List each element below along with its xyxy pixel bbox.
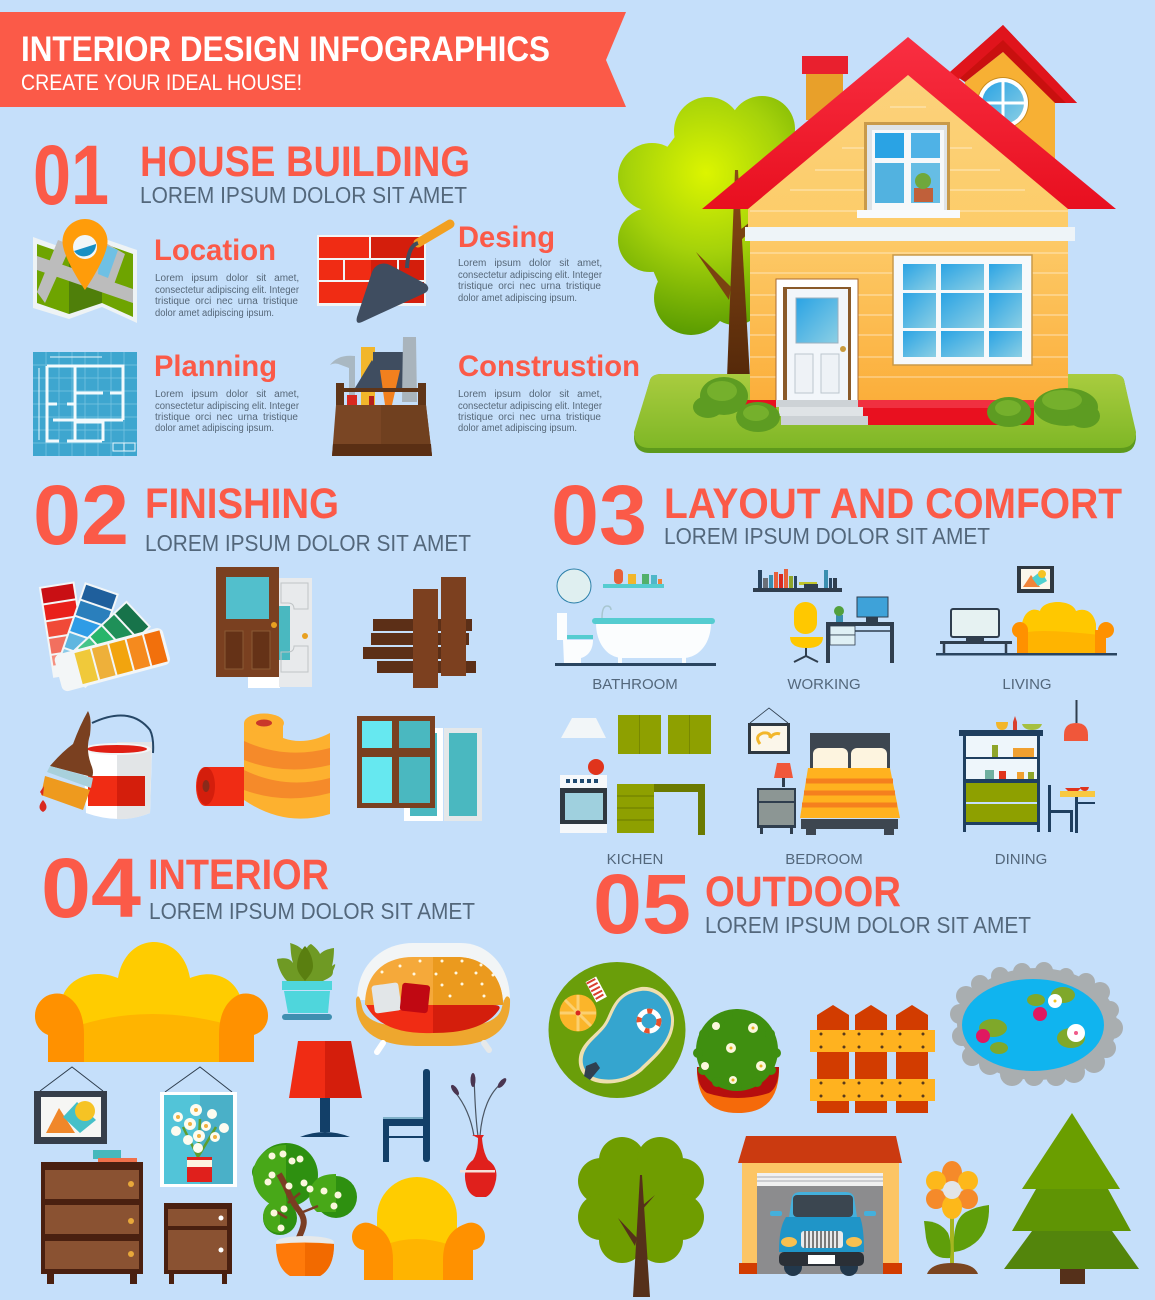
text block: location: Lorem ipsum dolor sit amet, xyxy=(155,273,299,284)
icon: brick wall and trowel xyxy=(317,224,450,323)
icon: yellow sofa xyxy=(35,942,268,1062)
text block: construstion: consectetur adipiscing elit. Integer xyxy=(458,401,603,412)
icon: flower xyxy=(924,1161,989,1274)
heading: 01 house building: 01 xyxy=(33,128,109,222)
icon: wallpaper roll xyxy=(196,714,330,819)
title banner: INTERIOR DESIGN INFOGRAPHICS xyxy=(21,30,550,69)
icon: living xyxy=(936,566,1117,656)
heading: 01 house building xyxy=(33,128,470,222)
bushes xyxy=(693,377,1100,432)
heading: 01 house building: LOREM IPSUM DOLOR SIT AMET xyxy=(140,182,467,208)
heading: 03 layout and comfort xyxy=(551,468,1122,562)
icon: potted plant xyxy=(277,943,335,1020)
label: bedroom: BEDROOM xyxy=(785,851,863,868)
heading: 04 interior: INTERIOR xyxy=(148,851,329,899)
steps and red path xyxy=(740,400,1034,425)
icon: bathroom xyxy=(555,569,716,666)
icon: tree xyxy=(578,1137,704,1297)
chimney xyxy=(802,56,848,120)
icon: chair xyxy=(383,1069,430,1162)
heading: 02 finishing xyxy=(33,468,471,562)
heading: 05 outdoor xyxy=(593,857,1031,951)
heading: 04 interior: LOREM IPSUM DOLOR SIT AMET xyxy=(149,898,475,924)
icon: blueprint xyxy=(33,352,137,456)
icon: window samples xyxy=(357,716,482,821)
icon: toolbox xyxy=(330,337,432,456)
label: kichen: KICHEN xyxy=(607,851,663,868)
icon: pond xyxy=(950,962,1123,1086)
text block: construstion: Construstion xyxy=(458,350,640,383)
heading: 03 layout and comfort: LAYOUT AND COMFORT xyxy=(664,480,1122,528)
text block: planning: tristique orci nec urna tristique xyxy=(155,412,298,423)
title banner: CREATE YOUR IDEAL HOUSE! xyxy=(21,70,302,95)
icon: round sofa xyxy=(356,943,510,1052)
text block: desing xyxy=(458,221,603,304)
icon: picture frame mountains xyxy=(34,1067,107,1144)
text block: construstion: Lorem ipsum dolor sit amet, xyxy=(458,389,602,400)
big window xyxy=(893,255,1032,365)
lawn xyxy=(634,374,1136,453)
label: working: WORKING xyxy=(787,676,861,693)
text block: planning: Lorem ipsum dolor sit amet, xyxy=(155,389,299,400)
text block: planning: Planning xyxy=(154,350,277,383)
icon: kitchen xyxy=(560,715,711,835)
label: dining: DINING xyxy=(995,851,1047,868)
icon: working xyxy=(753,569,894,663)
icon: wood planks xyxy=(363,577,476,688)
tree behind house xyxy=(618,96,815,378)
heading: 05 outdoor: OUTDOOR xyxy=(705,868,901,916)
icon: paint bucket and brush xyxy=(40,711,153,819)
icon: fir tree xyxy=(1004,1113,1139,1284)
icon: bedroom xyxy=(748,708,900,835)
icon: bonsai xyxy=(252,1143,357,1276)
icon: flower bush xyxy=(693,1009,781,1113)
icon: vase with reeds xyxy=(450,1073,508,1197)
title banner xyxy=(0,12,626,107)
heading: 02 finishing: LOREM IPSUM DOLOR SIT AMET xyxy=(145,530,471,556)
label: living: LIVING xyxy=(1002,676,1052,693)
illustration: house xyxy=(618,25,1136,453)
text block: desing: dolor amet adipiscing ipsum. xyxy=(458,293,577,304)
icon: dining xyxy=(959,700,1095,833)
icon: nightstand xyxy=(164,1203,232,1284)
text block: location: Location xyxy=(154,234,276,267)
icon: armchair xyxy=(352,1177,485,1280)
icon: fence xyxy=(810,1005,935,1113)
icon: colour swatch fan xyxy=(39,581,171,692)
icon: red lamp xyxy=(289,1041,362,1137)
icon: door samples xyxy=(216,567,312,688)
roof xyxy=(702,37,1116,209)
text block: location xyxy=(154,234,300,319)
text block: location: consectetur adipiscing elit. Integer xyxy=(155,285,300,296)
icon: picture frame flowers xyxy=(160,1067,237,1187)
text block: desing: consectetur adipiscing elit. Integer xyxy=(458,270,603,281)
text block: location: tristique orci nec urna tristique xyxy=(155,296,298,307)
heading: 04 interior: 04 xyxy=(41,841,141,935)
heading: 05 outdoor: LOREM IPSUM DOLOR SIT AMET xyxy=(705,912,1031,938)
walls and gable xyxy=(745,72,1075,402)
label: bathroom: BATHROOM xyxy=(592,676,678,693)
text block: planning: consectetur adipiscing elit. Integer xyxy=(155,401,300,412)
text block: planning xyxy=(154,350,300,434)
text block: planning: dolor amet adipiscing ipsum. xyxy=(155,423,274,434)
heading: 02 finishing: FINISHING xyxy=(145,480,339,528)
dormer xyxy=(950,25,1077,170)
text block: desing: tristique orci nec urna tristique xyxy=(458,281,601,292)
door xyxy=(776,279,858,401)
icon: swimming pool xyxy=(548,962,686,1098)
text block: desing: Lorem ipsum dolor sit amet, xyxy=(458,258,602,269)
heading: 03 layout and comfort: LOREM IPSUM DOLOR SIT AMET xyxy=(664,523,990,549)
heading: 01 house building: HOUSE BUILDING xyxy=(140,138,470,186)
heading: 05 outdoor: 05 xyxy=(593,857,691,951)
heading: 04 interior xyxy=(41,841,475,935)
heading: 03 layout and comfort: 03 xyxy=(551,468,647,562)
icon: map with pin xyxy=(33,219,137,323)
attic window xyxy=(857,122,960,218)
icon: garage with car xyxy=(738,1136,902,1276)
text block: construstion: tristique orci nec urna tristique xyxy=(458,412,601,423)
heading: 02 finishing: 02 xyxy=(33,468,129,562)
text block: desing: Desing xyxy=(458,221,555,254)
icon: dresser xyxy=(41,1150,143,1284)
text block: location: dolor amet adipiscing ipsum. xyxy=(155,308,274,319)
text block: construstion: dolor amet adipiscing ipsum. xyxy=(458,423,577,434)
text block: construstion xyxy=(458,350,640,434)
